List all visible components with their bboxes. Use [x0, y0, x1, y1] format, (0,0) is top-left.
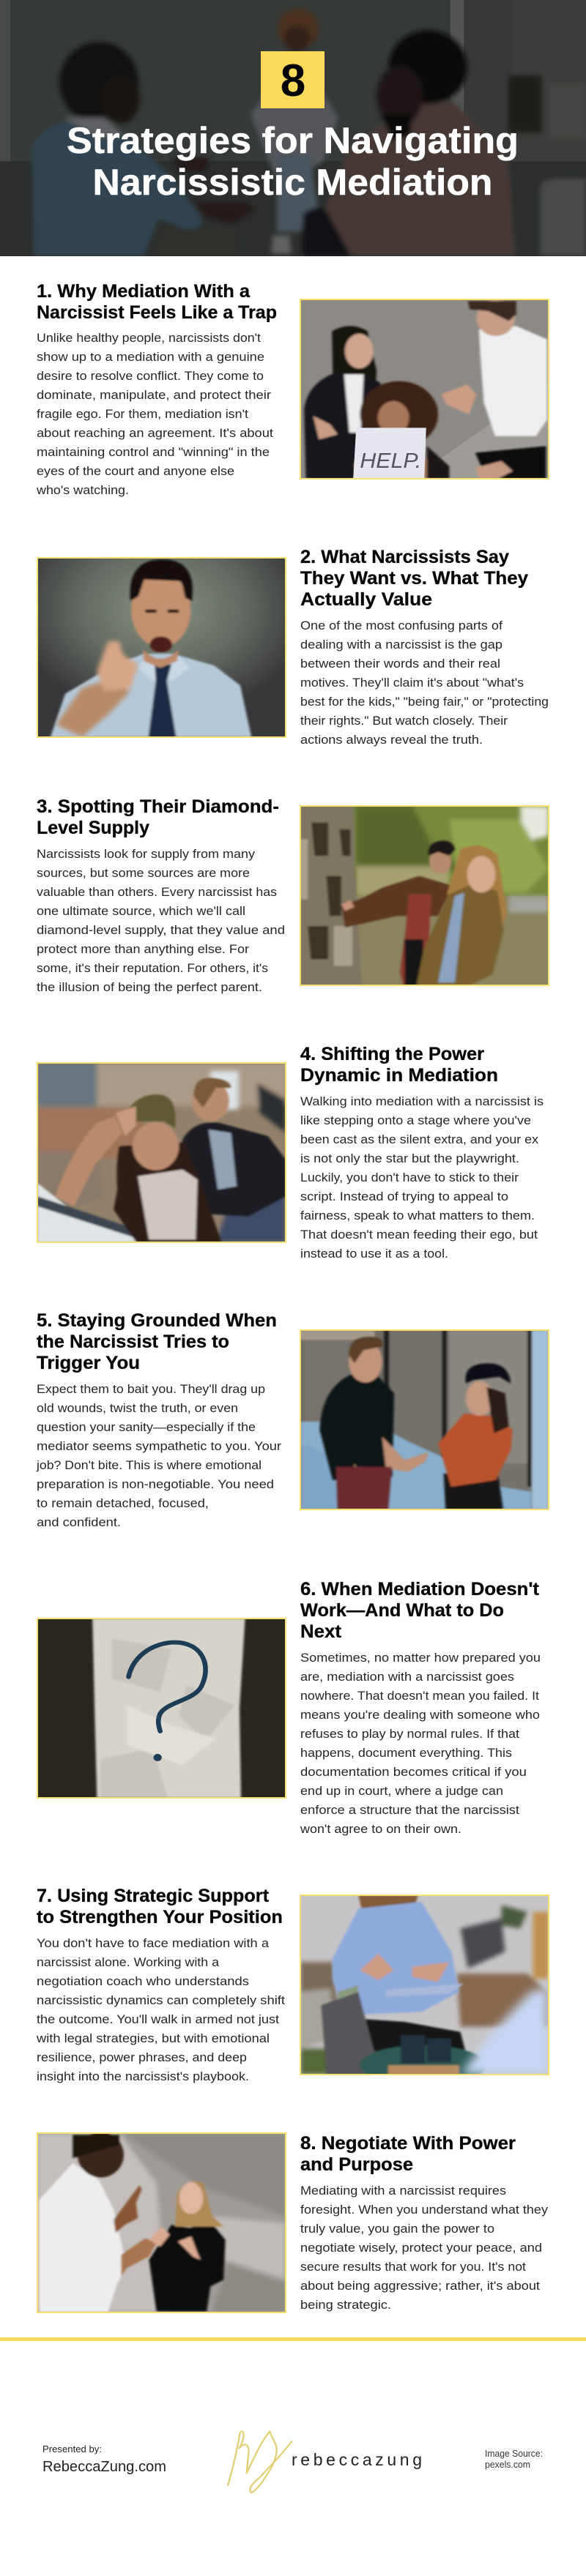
- body text: best for the kids," "being fair," or "protecting: [300, 695, 549, 709]
- presented by credit: [42, 2444, 166, 2475]
- body text: Narcissists look for supply from many: [37, 848, 256, 861]
- photo: couple talking outside: [300, 1330, 549, 1509]
- heading: to Strengthen Your Position: [37, 1907, 283, 1927]
- body text: Luckily, you don't have to stick to their: [300, 1171, 519, 1184]
- panel: section 1: [36, 281, 549, 497]
- body text: negotiate wisely, protect your peace, and: [300, 2241, 542, 2255]
- heading: [37, 281, 277, 323]
- body text: Expect them to bait you. They'll drag up: [37, 1383, 265, 1396]
- body text: negotiation coach who understands: [37, 1975, 249, 1988]
- hero photo: mediation session: [0, 0, 586, 256]
- body text: with legal strategies, but with emotional: [36, 2032, 270, 2045]
- body text: being strategic.: [300, 2299, 391, 2312]
- yellow number badge: [261, 51, 324, 108]
- photo: colleagues around woman holding help sign: HELP.: [360, 449, 421, 473]
- title: Strategies for Navigating: [67, 120, 519, 161]
- body text: means you're dealing with someone who: [300, 1709, 540, 1722]
- body text: like stepping onto a stage where you've: [300, 1114, 531, 1127]
- heading: They Want vs. What They: [300, 568, 528, 589]
- body text: and confident.: [37, 1516, 121, 1529]
- body text: refuses to play by normal rules. If that: [300, 1728, 519, 1741]
- heading: Next: [300, 1621, 342, 1642]
- heading: the Narcissist Tries to: [37, 1332, 229, 1352]
- panel: section 4: [37, 1044, 544, 1261]
- body text: [300, 619, 549, 747]
- body text: fragile ego. For them, mediation isn't: [37, 408, 248, 421]
- panel: section 3: [37, 796, 549, 994]
- body text: insight into the narcissist's playbook.: [37, 2070, 249, 2083]
- body text: are, mediation with a narcissist goes: [300, 1670, 514, 1684]
- heading: [300, 547, 528, 610]
- body text: foresight. When you understand what they: [300, 2203, 549, 2217]
- logo: rebeccazung signature: [228, 2431, 422, 2493]
- body text: between their words and their real: [300, 657, 500, 671]
- body text: preparation is non-negotiable. You need: [37, 1478, 274, 1491]
- heading: Level Supply: [37, 818, 149, 838]
- yellow number badge: 8: [281, 56, 305, 106]
- body text: [36, 332, 273, 497]
- body text: Unlike healthy people, narcissists don't: [37, 332, 261, 345]
- photo: upset woman in convertible: [37, 1063, 287, 1242]
- body text: Sometimes, no matter how prepared you: [300, 1651, 541, 1665]
- logo: rebeccazung signature: rebeccazung: [292, 2450, 422, 2469]
- body text: dealing with a narcissist is the gap: [300, 638, 502, 652]
- heading: 3. Spotting Their Diamond-: [37, 796, 279, 817]
- body text: narcissistic dynamics can completely shift: [37, 1994, 285, 2007]
- presented by credit: Presented by:: [42, 2444, 102, 2454]
- body text: who's watching.: [36, 484, 129, 497]
- body text: [300, 2184, 549, 2312]
- body text: old wounds, twist the truth, or even: [37, 1402, 238, 1415]
- photo: man and woman debating: [37, 2132, 286, 2312]
- hero banner: [0, 0, 586, 256]
- heading: [300, 1579, 540, 1642]
- body text: [300, 1651, 541, 1836]
- panel: section 8: [37, 2132, 549, 2312]
- heading: [300, 2133, 516, 2175]
- body text: [37, 848, 285, 994]
- body text: [300, 1095, 544, 1261]
- title: [67, 120, 519, 203]
- body text: script. Instead of trying to appeal to: [300, 1190, 508, 1203]
- body text: [36, 1937, 285, 2083]
- body text: motives. They'll claim it's about "what's: [300, 676, 524, 690]
- heading: 8. Negotiate With Power: [300, 2133, 516, 2154]
- body text: You don't have to face mediation with a: [37, 1937, 270, 1950]
- body text: One of the most confusing parts of: [300, 619, 502, 632]
- photo: colleagues around woman holding help sign: [300, 299, 549, 479]
- body text: eyes of the court and anyone else: [37, 465, 234, 478]
- heading: [300, 1044, 498, 1086]
- heading: [37, 1886, 283, 1927]
- body text: nowhere. That doesn't mean you failed. It: [300, 1690, 539, 1703]
- body text: end up in court, where a judge can: [300, 1785, 503, 1798]
- heading: 5. Staying Grounded When: [37, 1310, 277, 1331]
- body text: mediator seems sympathetic to you. Your: [37, 1440, 282, 1453]
- body text: [36, 1383, 282, 1529]
- body text: sources, but some sources are more: [37, 867, 250, 880]
- panel: section 2: [37, 547, 549, 747]
- body text: happens, document everything. This: [300, 1747, 512, 1760]
- heading: Work—And What to Do: [300, 1600, 504, 1621]
- body text: is not only the star but the playwright.: [300, 1152, 519, 1165]
- panel: section 7: [36, 1886, 549, 2086]
- title: Narcissistic Mediation: [92, 162, 492, 203]
- body text: maintaining control and "winning" in the: [37, 446, 270, 459]
- body text: about being aggressive; rather, it's about: [300, 2280, 540, 2293]
- photo: question mark on crumpled paper: [37, 1619, 286, 1798]
- body text: narcissist alone. Working with a: [37, 1956, 220, 1969]
- heading: 7. Using Strategic Support: [37, 1886, 270, 1906]
- body text: fairness, speak to what matters to them.: [300, 1209, 535, 1222]
- body text: Walking into mediation with a narcissist is: [300, 1095, 544, 1108]
- body text: truly value, you gain the power to: [300, 2222, 494, 2236]
- heading: Dynamic in Mediation: [300, 1065, 498, 1086]
- body text: their rights." But watch closely. Their: [300, 714, 508, 728]
- footer: [42, 2431, 543, 2493]
- heading: 6. When Mediation Doesn't: [300, 1579, 540, 1599]
- photo: coach gesturing in chair: [300, 1895, 549, 2086]
- panel: section 5: [36, 1310, 549, 1529]
- panel: section 6: [37, 1579, 541, 1836]
- heading: 4. Shifting the Power: [300, 1044, 484, 1064]
- heading: Trigger You: [37, 1353, 140, 1373]
- body text: valuable than others. Every narcissist has: [37, 886, 277, 899]
- body text: job? Don't bite. This is where emotional: [36, 1459, 262, 1472]
- body text: Mediating with a narcissist requires: [300, 2184, 506, 2198]
- body text: show up to a mediation with a genuine: [37, 351, 264, 364]
- image source credit: Image Source:: [485, 2449, 543, 2459]
- body text: documentation becomes critical if you: [300, 1766, 527, 1779]
- body text: some, it's their reputation. For others, it's: [37, 962, 268, 975]
- heading: Narcissist Feels Like a Trap: [37, 302, 277, 323]
- body text: desire to resolve conflict. They come to: [37, 370, 264, 383]
- body text: won't agree to on their own.: [300, 1823, 461, 1836]
- image source credit: pexels.com: [485, 2460, 530, 2470]
- heading: Actually Value: [300, 589, 432, 610]
- body text: resilience, power phrases, and deep: [37, 2051, 247, 2064]
- body text: actions always reveal the truth.: [300, 733, 483, 747]
- presented by credit: RebeccaZung.com: [42, 2459, 166, 2475]
- body text: dominate, manipulate, and protect their: [37, 389, 272, 402]
- body text: about reaching an agreement. It's about: [37, 427, 273, 440]
- heading: [37, 796, 279, 838]
- heading: [37, 1310, 277, 1373]
- body text: enforce a structure that the narcissist: [300, 1804, 519, 1817]
- body text: the illusion of being the perfect parent.: [37, 981, 262, 994]
- body text: question your sanity—especially if the: [37, 1421, 256, 1434]
- body text: protect more than anything else. For: [37, 943, 250, 956]
- body text: secure results that work for you. It's not: [300, 2260, 526, 2274]
- heading: 2. What Narcissists Say: [300, 547, 509, 567]
- body text: one ultimate source, which we'll call: [37, 905, 245, 918]
- body text: to remain detached, focused,: [37, 1497, 209, 1510]
- body text: instead to use it as a tool.: [300, 1247, 448, 1261]
- body text: diamond-level supply, that they value and: [37, 924, 285, 937]
- heading: 1. Why Mediation With a: [37, 281, 251, 302]
- photo: angry man pointing: [37, 558, 286, 737]
- image source credit: [485, 2449, 543, 2470]
- body text: That doesn't mean feeding their ego, but: [300, 1228, 538, 1242]
- photo: couple arguing in park: [300, 806, 549, 985]
- body text: been cast as the silent extra, and your ex: [300, 1133, 539, 1146]
- heading: and Purpose: [300, 2154, 413, 2175]
- body text: the outcome. You'll walk in armed not just: [37, 2013, 279, 2026]
